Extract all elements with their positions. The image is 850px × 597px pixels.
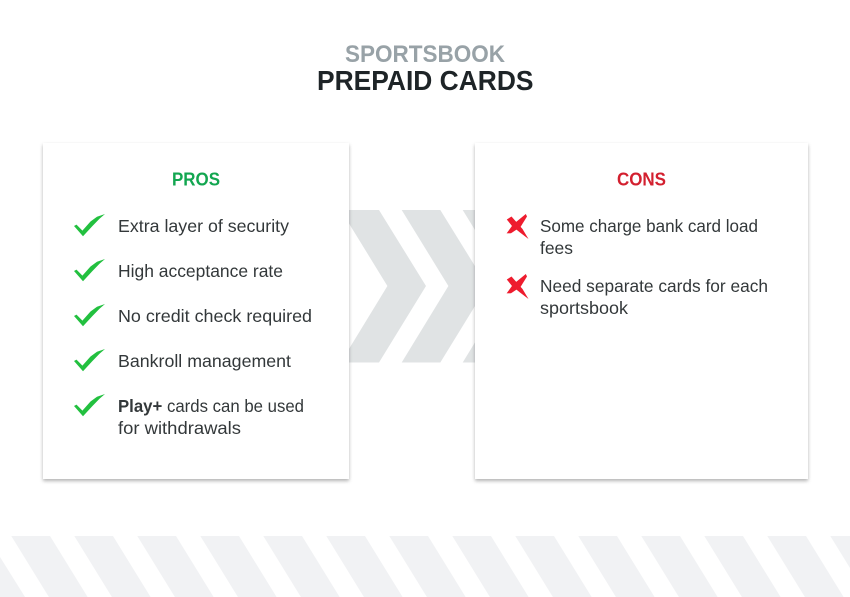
panel: pros <box>43 143 349 479</box>
pros icons: check marks <box>74 214 105 416</box>
cons card background <box>475 143 808 479</box>
cons list text: sportsbook <box>540 298 628 318</box>
footer stripe band <box>0 536 850 597</box>
pros list text: High acceptance rate <box>118 261 283 281</box>
cons list text: Need separate cards for each <box>540 276 768 296</box>
pros list text <box>118 216 312 438</box>
panel: cons <box>475 143 808 479</box>
title line: prepaid cards: PREPAID CARDS <box>317 65 534 96</box>
title <box>317 41 534 96</box>
pros list text: No credit check required <box>118 306 312 326</box>
title line: sportsbook: SPORTSBOOK <box>345 41 506 68</box>
cons icons: red crosses <box>507 214 528 299</box>
pros list text: Play+ cards can be used <box>118 396 304 416</box>
pros heading: PROS <box>172 170 220 190</box>
cons list text: Some charge bank card load <box>540 216 758 236</box>
pros list text: Extra layer of security <box>118 216 289 236</box>
cons heading: CONS <box>617 170 666 190</box>
pros card background <box>43 143 349 479</box>
chevron arrows between panels <box>341 210 548 362</box>
cons list text: fees <box>540 238 573 258</box>
cons list text <box>540 216 768 318</box>
pros list text: Bankroll management <box>118 351 291 371</box>
pros list text: for withdrawals <box>118 418 241 438</box>
